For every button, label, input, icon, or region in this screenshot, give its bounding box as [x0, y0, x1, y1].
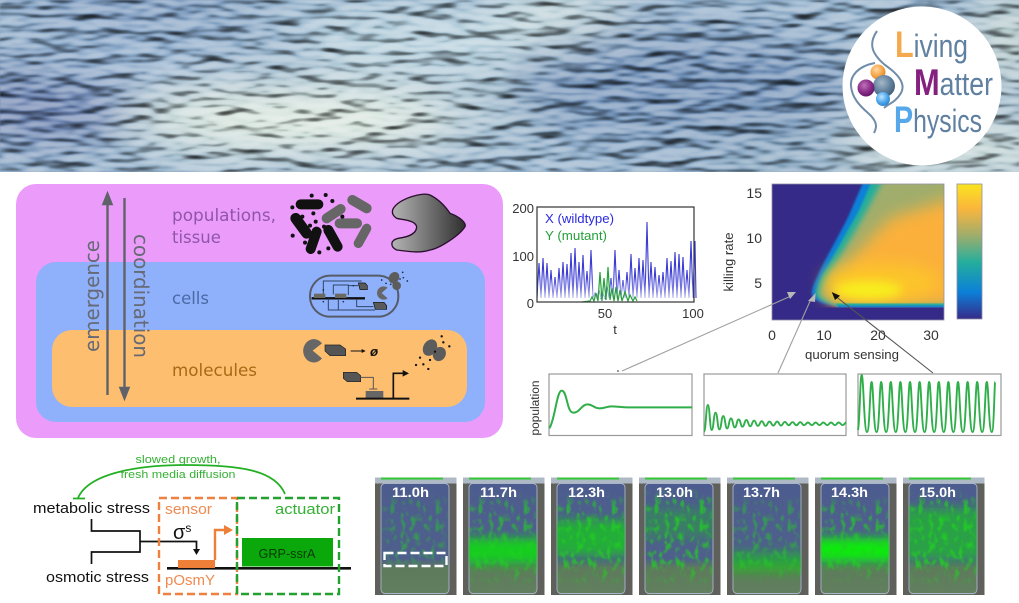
promoter arrow [215, 525, 233, 560]
chart: sustained oscillation trace [858, 374, 1001, 436]
chart: wildtype and mutant time series: 100 [512, 249, 534, 264]
arrow: coordination [120, 198, 128, 398]
icon: protein degradation [303, 339, 378, 362]
feedback arc [73, 465, 285, 498]
x ticks: 0 [768, 327, 776, 343]
input wiring [92, 519, 196, 564]
microscopy frame 13.7h [723, 478, 811, 595]
chart frame [537, 207, 694, 302]
label: osmotic stress: osmotic stress [46, 569, 149, 586]
promoter block [178, 560, 215, 568]
banner: rippled pattern surface [0, 0, 1019, 176]
chart: phase diagram heatmap: 10 [816, 327, 832, 343]
icon: cell with regulatory network [310, 270, 407, 317]
label: coordination: coordination [129, 234, 153, 358]
label: emergence: emergence [80, 240, 104, 352]
chart: weakly damped trace [704, 374, 846, 436]
label: cells: cells [172, 289, 209, 308]
label: molecules: molecules [172, 361, 257, 380]
chart: phase diagram heatmap [724, 184, 944, 362]
y ticks: 200 [512, 201, 534, 216]
label: populations, tissue: populations, [172, 206, 276, 225]
chart: wildtype and mutant time series: 100 [682, 306, 704, 321]
label: populations, tissue: tissue [172, 228, 221, 247]
microscopy frame 11.7h [459, 478, 547, 595]
label: sigma s: σ [173, 522, 185, 544]
microscopy frame 11.0h [375, 478, 456, 595]
GRP-ssrA gene [242, 538, 333, 566]
chart: wildtype and mutant time series: 0 [527, 296, 534, 311]
highlight: dashed region [384, 553, 446, 566]
chart: phase diagram heatmap: 20 [870, 327, 886, 343]
time label: 11.7h [480, 484, 517, 500]
chart: phase diagram heatmap: 5 [754, 275, 762, 291]
time label: 12.3h [568, 484, 605, 500]
time label: 13.0h [656, 484, 693, 500]
label: sigma s: s [185, 521, 191, 535]
time label: 13.7h [743, 484, 780, 500]
logo text: Living: Living [895, 24, 968, 65]
chart: phase diagram heatmap: 30 [923, 327, 939, 343]
colorbar [957, 184, 982, 319]
logo: Living Matter Physics [842, 6, 1002, 166]
legend: Y mutant: Y (mutant) [545, 228, 607, 243]
series: X wildtype [537, 222, 696, 298]
arrows: from heatmap regions to time traces [617, 292, 933, 373]
logo text: Physics: Physics [894, 99, 982, 140]
microscopy frame 15.0h [899, 478, 987, 595]
microscopy frame 14.3h [811, 478, 899, 595]
arrow: emergence [104, 194, 112, 395]
box: sensor [159, 498, 237, 594]
wiring arrowhead [193, 549, 200, 555]
label: GRP-ssrA: GRP-ssrA [258, 546, 316, 561]
chart: damped trace [549, 374, 692, 436]
microscopy frame 12.3h [547, 478, 635, 595]
layer: populations [16, 184, 503, 438]
icon: bacteria population [292, 195, 367, 252]
x axis label: quorum sensing [805, 347, 899, 362]
chart: phase diagram heatmap: 10 [746, 230, 762, 246]
heatmap wedge [810, 184, 944, 308]
icon: gene promoter with transcription factor [343, 370, 409, 399]
logo icon: strands and spheres [851, 31, 903, 133]
x ticks: 50 [598, 306, 612, 321]
label: actuator: actuator [275, 501, 335, 518]
y ticks: 15 [746, 185, 762, 201]
y axis label: killing rate [722, 232, 736, 292]
fade band over spike bases [538, 278, 693, 298]
box: actuator [237, 498, 339, 594]
logo text: Matter: Matter [914, 62, 993, 103]
feedback label: slowed growth, [136, 454, 220, 466]
icon: ribosome with product [416, 336, 449, 369]
time label: 14.3h [831, 484, 868, 500]
label: sensor: sensor [165, 501, 212, 518]
layer: molecules [52, 330, 467, 407]
legend: X wildtype: X (wildtype) [545, 211, 614, 226]
label: metabolic stress: metabolic stress [33, 500, 150, 517]
feedback label: fresh media diffusion [120, 469, 236, 481]
icons in panel [292, 194, 465, 399]
diagram: genetic circuit [33, 454, 351, 594]
series: Y mutant [582, 267, 637, 302]
microscopy frame 13.0h [635, 478, 723, 595]
label: population axis: population [530, 380, 542, 436]
layer: cells [36, 262, 485, 422]
time label: 15.0h [919, 484, 956, 500]
time label: 11.0h [392, 484, 429, 500]
x axis label: t [613, 322, 617, 337]
icon: protein degradation: ø [370, 344, 378, 359]
icon: tissue blob [392, 194, 465, 252]
label: pOsmY: pOsmY [165, 572, 215, 589]
panel: scales of organisation [16, 184, 503, 438]
DNA line [167, 567, 351, 570]
chart: wildtype and mutant time series [512, 201, 704, 337]
